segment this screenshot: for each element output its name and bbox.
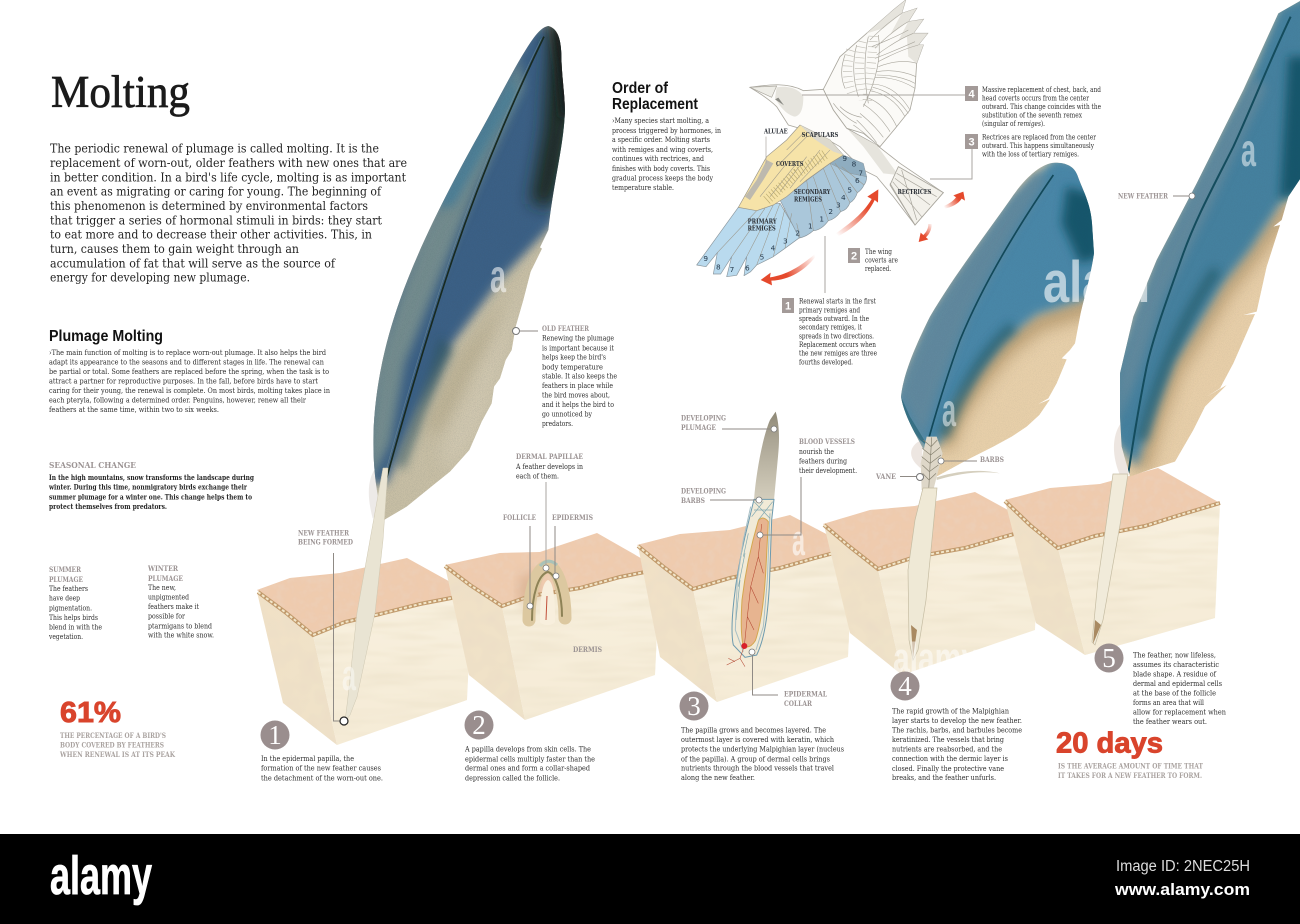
seasonal change block: protect themselves from predators.	[49, 502, 167, 511]
step 2 caption: dermal ones and form a collar-shaped	[465, 764, 590, 773]
order of replacement text: gradual process keeps the body	[612, 174, 714, 183]
arrow: primaries	[761, 254, 815, 285]
remige numbers: 5	[760, 253, 765, 262]
site url: www.alamy.com	[1114, 880, 1250, 899]
plumage molting text: be partial or total. Some feathers are replaced before the spring, when the task is to	[49, 367, 329, 376]
wing labels: COVERTS	[776, 161, 804, 168]
step 3 callout: 3	[968, 136, 975, 148]
remige numbers: 5	[847, 186, 852, 195]
body	[750, 85, 943, 225]
intro text block: to eat more and to decrease their other activities. This, in	[50, 228, 372, 242]
step 1 caption: In the epidermal papilla, the	[261, 754, 354, 763]
step 4 callout: (singular of remiges).	[982, 119, 1045, 128]
remige numbers: 1	[808, 221, 813, 230]
intro text block: The periodic renewal of plumage is called molting. It is the	[50, 142, 379, 156]
label: new feather being formed: BEING FORMED	[298, 538, 353, 547]
stage 4 shaft	[908, 488, 937, 660]
step 1 callout: Replacement occurs when	[799, 340, 876, 349]
near wing	[697, 125, 867, 277]
step 4 callout: Massive replacement of chest, back, and	[982, 85, 1101, 94]
label: follicle: FOLLICLE	[503, 513, 536, 522]
order of replacement text	[612, 116, 721, 192]
step 4 callout: 4	[968, 88, 975, 100]
step 4 caption	[890, 671, 1022, 782]
step 1 callout: spreads outward. In the	[799, 314, 869, 323]
summer plumage text: The feathers	[49, 584, 88, 593]
label: new feather: NEW FEATHER	[1118, 192, 1169, 201]
old feather callout: stable. It also keeps the	[542, 372, 617, 381]
wing labels: PRIMARY	[748, 218, 777, 225]
remige numbers: 7	[858, 168, 863, 177]
step 4 caption: closed. Finally the protective vane	[892, 764, 1004, 773]
old feather callout: predators.	[542, 419, 573, 428]
intro text block: accumulation of fat that will serve as the source of	[50, 256, 336, 270]
watermarks	[342, 124, 1256, 700]
developing feather (stage 3)	[727, 412, 779, 667]
label: new feather being formed: NEW FEATHER	[298, 528, 350, 537]
intro text block: turn, causes them to gain weight through an	[50, 242, 299, 256]
winter plumage text: PLUMAGE	[148, 574, 183, 583]
label: dermis: DERMIS	[573, 645, 602, 654]
remige numbers: 1	[819, 215, 824, 224]
step 4 caption: The rachis, barbs, and barbules become	[892, 726, 1022, 735]
tertial patch	[830, 155, 867, 177]
step 3 callout	[930, 132, 1096, 179]
order of replacement heading	[612, 80, 698, 113]
stat: 20 days: IT TAKES FOR A NEW FEATHER TO FORM.	[1058, 771, 1202, 780]
label: dermal papillae: each of them.	[516, 472, 559, 481]
step 2 caption	[464, 710, 595, 782]
step 1 callout: primary remiges and	[799, 305, 860, 314]
step 4 callout: head coverts occurs from the center	[982, 93, 1089, 102]
step 3 caption: along the new feather.	[681, 773, 755, 782]
tail feathers	[890, 167, 943, 225]
intro text block: that trigger a series of hormonal stimuli in birds: they start	[50, 213, 382, 227]
remige numbers: 7	[730, 265, 735, 274]
follicle	[519, 561, 565, 625]
step 2 caption: A papilla develops from skin cells. The	[464, 745, 591, 754]
far wing	[823, 0, 928, 147]
winter plumage text: unpigmented	[148, 593, 189, 602]
watermarks: a	[490, 250, 506, 302]
summer plumage text	[48, 565, 102, 641]
label: vane	[875, 472, 924, 481]
summer plumage text: blend in with the	[49, 623, 102, 632]
intro text block	[50, 142, 407, 285]
label: vane: VANE	[875, 472, 896, 481]
plumage molting text: each pteryla, following a determined order. Penguins, however, renew all their	[49, 396, 306, 405]
sheath	[754, 412, 779, 500]
label: epidermis: EPIDERMIS	[552, 513, 593, 522]
old feather callout: OLD FEATHER	[542, 324, 590, 333]
step 2 callout: replaced.	[865, 264, 891, 273]
step 3 caption: nutrients through the blood vessels that travel	[681, 764, 834, 773]
old feather callout: Renewing the plumage	[542, 334, 614, 343]
order of replacement text: ›Many species start molting, a	[612, 116, 709, 125]
old feather callout: body temperature	[542, 362, 603, 371]
summer plumage text: pigmentation.	[49, 603, 92, 612]
remige numbers: 6	[855, 176, 860, 185]
step 3 callout: with the loss of tertiary remiges.	[982, 150, 1079, 159]
step 1 caption: formation of the new feather causes	[261, 764, 381, 773]
step 1 callout: Renewal starts in the first	[799, 297, 876, 306]
vane	[921, 437, 943, 490]
step 5 caption: forms an area that will	[1133, 698, 1204, 707]
step 4 caption: layer starts to develop the new feather.	[892, 716, 1022, 725]
step 3 caption: of the papilla). A group of dermal cells brings	[681, 754, 830, 763]
step 5 caption: blade shape. A residue of	[1133, 669, 1217, 678]
order of replacement heading: Replacement	[612, 96, 698, 113]
step 3 caption: outermost layer is covered with keratin, which	[681, 735, 834, 744]
bird diagram	[697, 0, 965, 285]
winter plumage text: feathers make it	[148, 602, 199, 611]
label: epidermal collar: EPIDERMAL	[784, 690, 828, 699]
title: Molting	[51, 67, 190, 117]
label: barbs: BARBS	[980, 455, 1004, 464]
step 1 callout: 1	[785, 300, 791, 312]
number 3	[680, 691, 708, 721]
image id: Image ID: 2NEC25H	[1116, 858, 1250, 875]
step 2 caption: epidermal cells multiply faster than the	[465, 754, 595, 763]
footer logo: alamy	[50, 846, 152, 906]
number 1: 1	[268, 720, 282, 750]
watermarks: a	[942, 384, 956, 436]
winter plumage text: with the white snow.	[148, 631, 214, 640]
summer plumage text: SUMMER	[49, 565, 82, 574]
old feather callout: helps keep the bird's	[542, 353, 606, 362]
stat: 20 days: 20 days	[1056, 728, 1163, 760]
intro text block: this phenomenon is determined by environmental factors	[50, 199, 368, 213]
label: blood vessels	[757, 437, 857, 538]
order of replacement text: process triggered by hormones, in	[612, 126, 721, 135]
label: developing plumage: PLUMAGE	[681, 423, 716, 432]
arrow: secondaries	[836, 189, 878, 236]
step 5 caption: assumes its characteristic	[1133, 660, 1219, 669]
seasonal change block: winter. During this time, nonmigratory birds exchange their	[48, 483, 248, 492]
step 5 caption: the feather wears out.	[1133, 717, 1207, 726]
step 1 callout: secondary remiges, it	[799, 323, 862, 332]
order of replacement text: temperature stable.	[612, 183, 674, 192]
remige numbers: 6	[745, 264, 750, 273]
order of replacement text: a specific order. Molting starts	[612, 135, 710, 144]
coverts	[738, 125, 843, 211]
step 3 callout: outward. This happens simultaneously	[982, 141, 1095, 150]
watermarks: a	[342, 651, 356, 700]
label: blood vessels: nourish the	[799, 447, 834, 456]
plumage molting text: ›The main function of molting is to replace worn-out plumage. It also helps the bird	[49, 348, 326, 357]
wing labels: REMIGES	[748, 225, 776, 232]
remige numbers	[703, 154, 863, 274]
label: developing barbs	[681, 487, 762, 505]
step 1 callout: the new remiges are three	[799, 349, 877, 358]
step 4 caption: keratinized. The vessels that bring	[892, 735, 1004, 744]
label: new feather being formed	[298, 528, 353, 725]
remige numbers: 3	[783, 236, 788, 245]
watermarks: a	[792, 516, 805, 565]
label: blood vessels: feathers during	[799, 457, 847, 466]
primary remiges	[697, 203, 800, 277]
skin block 1	[257, 558, 472, 745]
label: epidermis	[552, 513, 593, 579]
summer plumage text: vegetation.	[48, 632, 83, 641]
wing labels	[748, 129, 932, 232]
label: follicle	[503, 513, 536, 609]
number 4: 4	[898, 671, 912, 701]
wing labels: REMIGES	[794, 196, 822, 203]
order of replacement heading: Order of	[612, 80, 669, 97]
summer plumage text: have deep	[49, 594, 80, 603]
winter plumage text: possible for	[148, 612, 185, 621]
skin block 5	[1005, 468, 1220, 655]
barbs lattice	[736, 502, 773, 620]
seasonal change block	[48, 460, 255, 511]
skin block 2	[445, 533, 660, 720]
plumage molting text	[49, 348, 330, 414]
intro text block: energy for developing new plumage.	[50, 271, 250, 285]
step 3 callout: Rectrices are replaced from the center	[982, 132, 1096, 142]
remige numbers: 9	[842, 154, 847, 163]
old feather callout: feathers in place while	[542, 381, 613, 390]
step 4 callout: outward. This change coincides with the	[982, 102, 1101, 111]
old feather callout: and it helps the bird to	[542, 400, 614, 409]
number 3: 3	[687, 691, 701, 721]
step 2 callout: The wing	[865, 247, 892, 256]
winter plumage text: The new,	[148, 583, 176, 592]
step 4 callout	[802, 85, 1101, 128]
label: epidermal collar	[749, 649, 828, 708]
step 5 caption: at the base of the follicle	[1133, 689, 1216, 698]
blood vessels	[727, 524, 763, 667]
old feather callout	[512, 324, 617, 428]
summer plumage text: This helps birds	[49, 613, 98, 622]
step 4 caption: nutrients are reabsorbed, and the	[892, 745, 1002, 754]
wing labels: RECTRICES	[898, 189, 932, 196]
step 2 callout	[848, 247, 898, 273]
plumage molting text: attract a partner for reproductive purposes. In the fall, before birds have to start	[49, 376, 318, 385]
order of replacement text: continues with rectrices, and	[612, 154, 704, 163]
winter plumage text	[147, 564, 214, 640]
label: developing plumage: DEVELOPING	[681, 414, 726, 423]
step 3 caption	[680, 691, 844, 782]
step 1 callout	[782, 236, 877, 366]
old feather shaft	[345, 468, 388, 722]
step 4 caption: The rapid growth of the Malpighian	[892, 706, 1009, 715]
winter plumage text: WINTER	[147, 564, 179, 573]
old feather callout: the bird moves about,	[542, 391, 610, 400]
step 4 caption: breaks, and the feather unfurls.	[892, 773, 996, 782]
label: epidermal collar: COLLAR	[784, 699, 813, 708]
seasonal change block: SEASONAL CHANGE	[49, 460, 136, 470]
remige numbers: 4	[841, 193, 846, 202]
step 5 caption: The feather, now lifeless,	[1133, 650, 1216, 659]
label: barbs	[938, 455, 1004, 464]
wing labels: SCAPULARS	[802, 132, 839, 139]
seasonal change block: In the high mountains, snow transforms the landscape during	[49, 473, 255, 482]
stat: 61%: 61%	[60, 697, 121, 729]
step 1 caption	[260, 720, 383, 782]
watermarks: a	[1241, 124, 1256, 176]
new feather (stage 4)	[893, 157, 1103, 660]
stat: 20 days: IS THE AVERAGE AMOUNT OF TIME THAT	[1058, 762, 1203, 771]
arrow: rectrices out	[944, 192, 965, 209]
step 5 caption	[1094, 643, 1226, 726]
remige numbers: 8	[852, 160, 857, 169]
old feather callout: is important because it	[542, 343, 614, 352]
remige numbers: 8	[716, 262, 721, 271]
label: dermal papillae: A feather develops in	[515, 462, 583, 471]
order of replacement text: with remiges and wing coverts,	[612, 145, 713, 154]
stat: 61%	[59, 697, 175, 759]
footer bar	[0, 834, 1300, 924]
label: developing barbs: BARBS	[681, 496, 705, 505]
remige numbers: 2	[828, 207, 833, 216]
order of replacement text: finishes with body coverts. This	[612, 164, 710, 173]
step 4 callout: substitution of the seventh remex	[982, 111, 1083, 120]
intro text block: an event as migrating or caring for young. The beginning of	[50, 185, 382, 199]
stage 5 shaft	[1092, 474, 1128, 645]
step 2 callout: coverts are	[865, 256, 898, 265]
remige numbers: 4	[771, 244, 776, 253]
number 5: 5	[1102, 643, 1116, 673]
step 3 caption: The papilla grows and becomes layered. The	[681, 726, 826, 735]
plumage molting text: adapt its appearance to the seasons and to different stages in life. The renewal can	[49, 357, 324, 366]
seasonal change block: summer plumage for a winter one. This change helps them to	[49, 492, 252, 501]
plumage molting text: feathers at the same time, within two to six weeks.	[49, 405, 219, 414]
step 5 caption: allow for replacement when	[1133, 708, 1226, 717]
old feather callout: go unnoticed by	[542, 410, 593, 419]
stat: 61%: THE PERCENTAGE OF A BIRD'S	[60, 731, 166, 740]
summer plumage text: PLUMAGE	[49, 575, 83, 584]
label: dermal papillae	[515, 452, 583, 571]
secondary remiges	[780, 163, 867, 238]
heading: plumage molting: Plumage Molting	[49, 328, 163, 345]
label: blood vessels: their development.	[799, 466, 857, 475]
wing labels: ALULAE	[763, 129, 788, 136]
remige numbers: 3	[836, 201, 841, 210]
watermarks: alam	[1043, 250, 1150, 315]
step 4 caption: connection with the dermic layer is	[892, 754, 1008, 763]
step 2 caption: depression called the follicle.	[465, 773, 560, 782]
step 1 callout: fourths developed.	[799, 357, 853, 366]
arrow: rectrices in	[919, 224, 932, 242]
label: dermal papillae: DERMAL PAPILLAE	[516, 452, 583, 461]
new feather (stage 5)	[1092, 0, 1300, 645]
winter plumage text: ptarmigans to blend	[148, 621, 212, 630]
old feather	[345, 20, 573, 722]
remige numbers: 9	[703, 254, 708, 263]
watermarks: alamy	[893, 634, 978, 681]
stat: 20 days	[1056, 728, 1203, 780]
step 1 caption: the detachment of the worn-out one.	[261, 773, 383, 782]
skin block 4	[823, 492, 1039, 675]
label: developing plumage	[681, 414, 777, 432]
step 2 callout: 2	[851, 250, 857, 262]
step 3 caption: protects the underlying Malpighian layer (nucleus	[681, 745, 844, 754]
plumage molting text: caring for their young, the renewal is complete. On most birds, molting takes place in	[49, 386, 330, 395]
wing labels: SECONDARY	[794, 189, 831, 196]
skin block 3	[637, 515, 853, 702]
step 5 caption: dermal and epidermal cells	[1133, 679, 1222, 688]
remige numbers: 2	[795, 229, 800, 238]
stat: 61%: WHEN RENEWAL IS AT ITS PEAK	[59, 750, 175, 759]
label: blood vessels: BLOOD VESSELS	[799, 437, 855, 446]
stat: 61%: BODY COVERED BY FEATHERS	[60, 741, 164, 750]
number 2: 2	[472, 710, 486, 740]
step 1 callout: spreads in two directions.	[799, 331, 874, 340]
intro text block: in better condition. In a bird's life cycle, molting is as important	[50, 170, 406, 184]
label: developing barbs: DEVELOPING	[681, 487, 726, 496]
intro text block: replacement of worn-out, older feathers with new ones that are	[50, 156, 407, 170]
